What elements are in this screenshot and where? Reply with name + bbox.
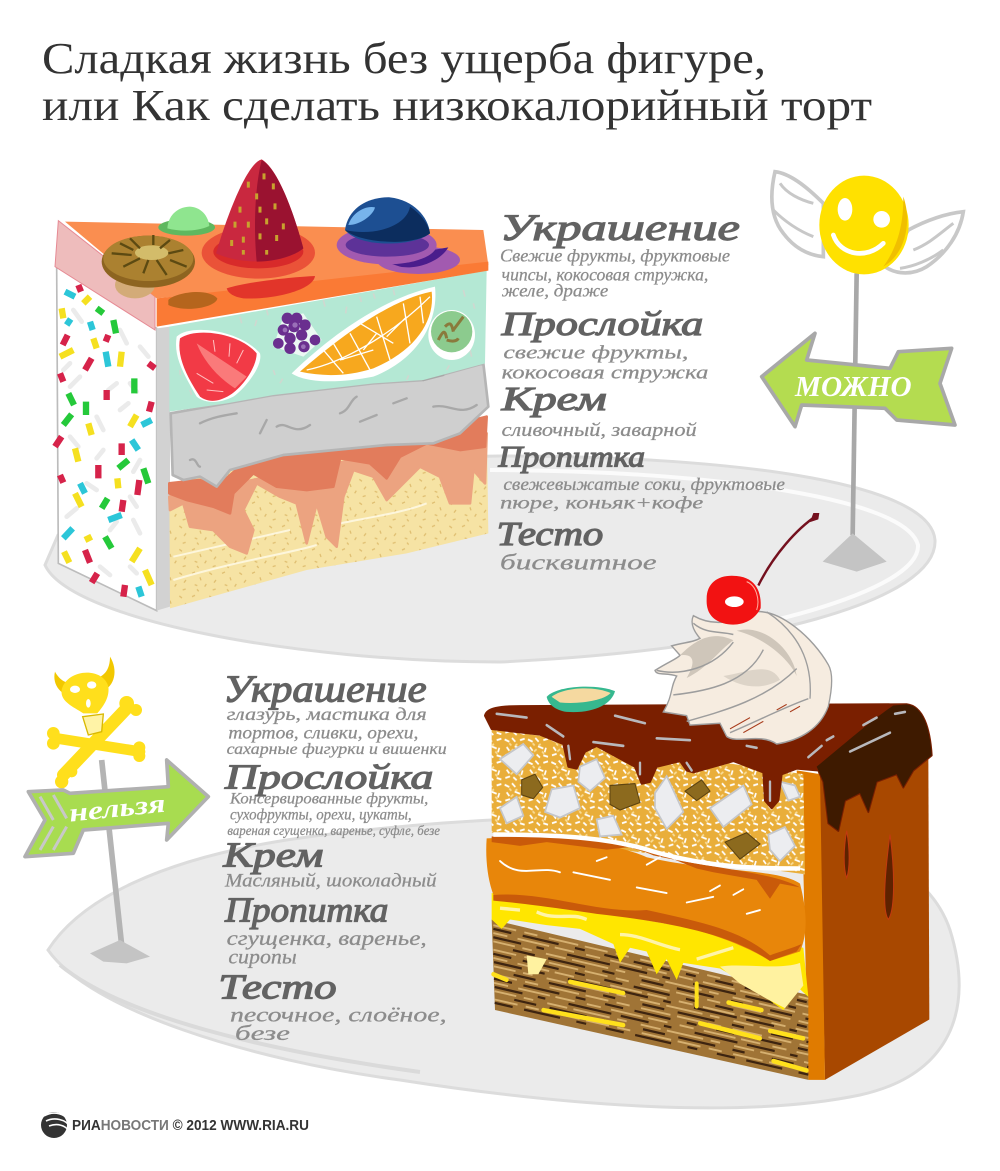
- labels: allowed ingredients: [497, 208, 785, 574]
- arrow sign: [762, 333, 955, 427]
- label: soak: сгущенка, варенье,: [227, 928, 427, 950]
- label: dough: песочное, слоёное,: [230, 1005, 447, 1027]
- layer: sponge: [169, 417, 488, 608]
- nut and meringue chunks: [500, 744, 800, 861]
- globe: [41, 1112, 70, 1138]
- label: soak: Пропитка: [224, 891, 388, 930]
- plate: bottom: [48, 817, 959, 1108]
- topping: green jelly: [158, 207, 215, 236]
- label: decoration: глазурь, мастика для: [227, 704, 427, 724]
- sign: forbidden: [25, 657, 208, 963]
- label: dough: безе: [235, 1023, 290, 1045]
- label: dough: [497, 516, 657, 574]
- labels: forbidden ingredients: [218, 669, 447, 1045]
- whipped cream: [655, 612, 832, 744]
- label: soak: [497, 441, 785, 512]
- footer: logo: РИАНОВОСТИ © 2012 WWW.RIA.RU: [72, 1118, 309, 1134]
- wings: [772, 172, 963, 273]
- pole base: [823, 533, 887, 572]
- plate: top: [45, 456, 935, 662]
- label: cream: [222, 836, 437, 892]
- label: soak: сиропы: [228, 946, 297, 968]
- label: filling: Прослойка: [500, 306, 703, 343]
- dark side drips: [844, 831, 894, 919]
- fruit: strawberry slice: [176, 330, 260, 402]
- chocolate glaze: [485, 704, 932, 831]
- label: decoration: Украшение: [223, 669, 427, 711]
- pole: [102, 760, 122, 945]
- label: filling: Консервированные фрукты,: [229, 790, 428, 807]
- smiley: [819, 176, 909, 274]
- fruit: kiwi slice: [428, 310, 475, 360]
- fruit: grapes: [273, 313, 322, 357]
- label: dough: Тесто: [218, 967, 337, 1006]
- layer: orange: [486, 835, 806, 961]
- layer: yellow cream: [492, 893, 808, 1010]
- label: decoration: [223, 669, 447, 758]
- cake: high-calorie slice: [485, 513, 932, 1080]
- label: decoration: [500, 208, 740, 301]
- topping: kiwi: [102, 235, 195, 298]
- label: decoration: сахарные фигурки и вишенки: [227, 741, 447, 758]
- topping: blueberry dragee: [337, 197, 460, 274]
- label: filling: свежие фрукты,: [503, 342, 688, 363]
- label: decoration: Свежие фрукты, фруктовые: [500, 246, 730, 266]
- pole base: [90, 940, 150, 963]
- label: soak: свежевыжатые соки, фруктовые: [503, 474, 785, 494]
- label: cream: Крем: [222, 836, 323, 875]
- label: filling: сухофрукты, орехи, цукаты,: [230, 806, 412, 823]
- cake top surface: [55, 221, 488, 330]
- arrow sign: МОЖНО: [794, 372, 912, 403]
- label: filling: [224, 757, 440, 839]
- label: dough: Тесто: [497, 516, 603, 553]
- label: decoration: желе, драже: [502, 281, 608, 301]
- label: filling: [500, 306, 708, 383]
- label: dough: бисквитное: [500, 549, 657, 574]
- label: soak: пюре, коньяк+кофе: [500, 492, 703, 512]
- cream strokes: [190, 375, 477, 467]
- pole: [853, 273, 857, 535]
- layer: top sponge: [492, 729, 805, 874]
- label: cream: Крем: [500, 381, 607, 418]
- arrow sign: [25, 760, 208, 857]
- cake: low-calorie slice: [55, 159, 488, 611]
- label: decoration: чипсы, кокосовая стружка,: [502, 265, 708, 285]
- layer: dough stripes: [492, 919, 808, 1080]
- label: filling: кокосовая стружка: [502, 362, 708, 383]
- label: filling: Прослойка: [224, 757, 433, 796]
- candy on top: [547, 687, 615, 712]
- label: filling: вареная сгущенка, варенье, суфле, безе: [227, 824, 440, 839]
- label: cream: Масляный, шоколадный: [224, 871, 437, 892]
- title: Сладкая жизнь без ущерба фигуре,: [42, 34, 766, 83]
- arrow sign: нельзя: [68, 789, 167, 828]
- front drops: [168, 292, 217, 309]
- label: cream: сливочный, заварной: [502, 420, 697, 441]
- title: [42, 34, 872, 130]
- label: decoration: тортов, сливки, орехи,: [228, 722, 418, 742]
- cake side with sprinkles: [55, 267, 157, 611]
- layer: mint filling: [169, 271, 487, 412]
- layer: syrup dark: [169, 417, 487, 513]
- crossbones: [47, 696, 145, 788]
- title: или Как сделать низкокалорийный торт: [42, 81, 872, 130]
- label: decoration: Украшение: [500, 208, 740, 249]
- label: dough: [218, 967, 447, 1045]
- footer: logo: [41, 1112, 309, 1138]
- label: cream: [500, 381, 697, 441]
- cake side orange edge: [797, 770, 825, 1080]
- cake front strip: [157, 327, 170, 611]
- skull: [54, 657, 115, 735]
- fruit: orange slice: [292, 287, 435, 381]
- layer: grey cream: [171, 363, 488, 487]
- label: soak: [224, 891, 427, 968]
- sign: allowed: [762, 172, 963, 572]
- label: soak: Пропитка: [497, 441, 645, 474]
- mint texture: [180, 290, 475, 395]
- cake side: [818, 755, 929, 1080]
- cherry: [707, 513, 819, 625]
- topping: strawberry: [202, 159, 315, 279]
- layer: syrup light: [169, 433, 487, 553]
